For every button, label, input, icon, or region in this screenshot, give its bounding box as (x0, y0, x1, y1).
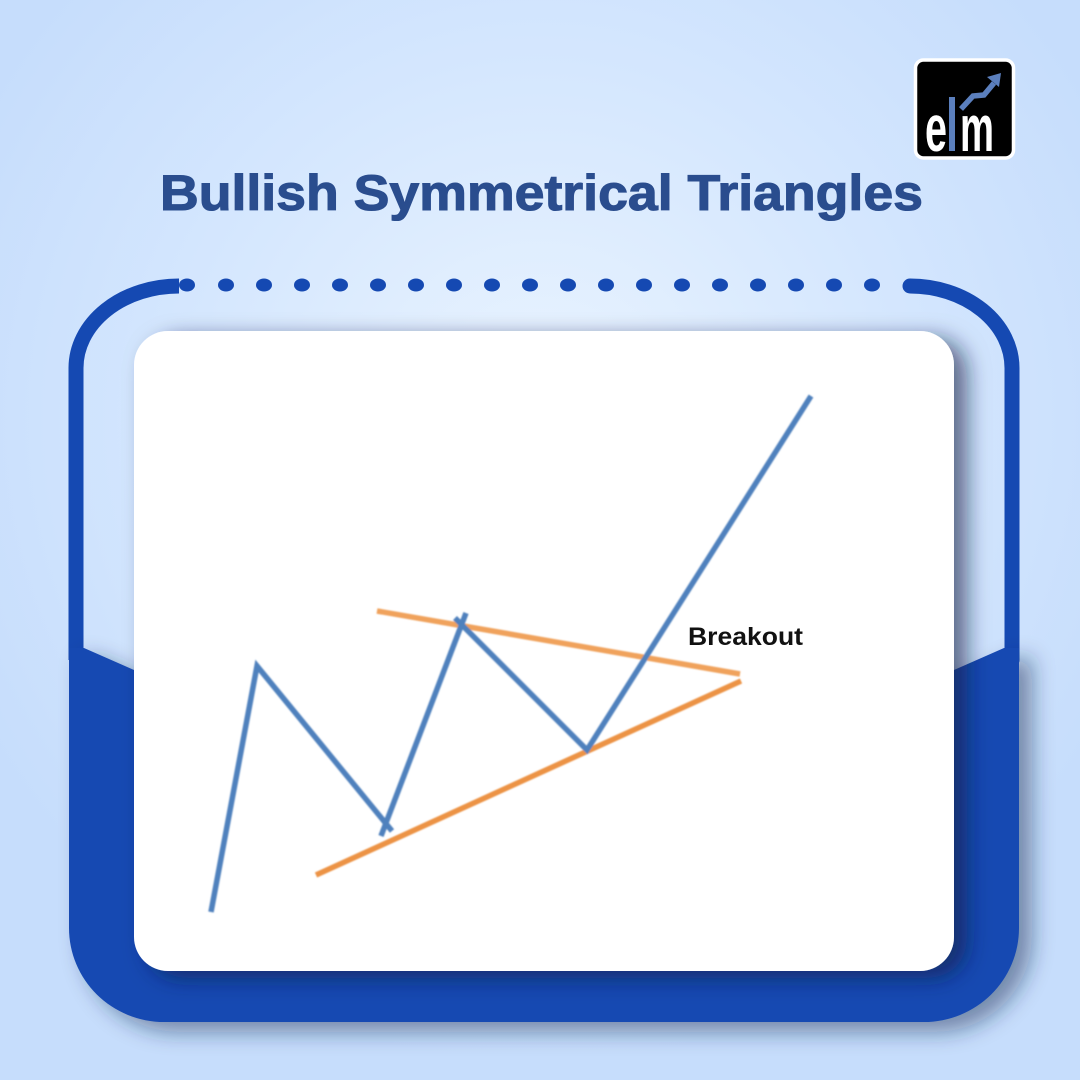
panel lower blue base (69, 648, 1019, 1022)
dotted top border (179, 278, 880, 292)
upper trendline (377, 611, 740, 674)
logo: elm (916, 60, 1014, 165)
title: Bullish Symmetrical Triangles (160, 165, 923, 221)
white chart card (134, 331, 954, 971)
logo letter m: m (960, 91, 994, 165)
breakout label: Breakout (688, 623, 804, 651)
lower trendline (316, 681, 741, 875)
chart: bullish symmetrical triangle (211, 396, 811, 912)
logo rising arrow (961, 73, 1001, 109)
price line (211, 396, 811, 912)
logo letter l bar (949, 97, 955, 151)
logo badge (916, 60, 1014, 158)
panel frame outline (76, 286, 1012, 660)
logo letter e: e (925, 91, 947, 165)
